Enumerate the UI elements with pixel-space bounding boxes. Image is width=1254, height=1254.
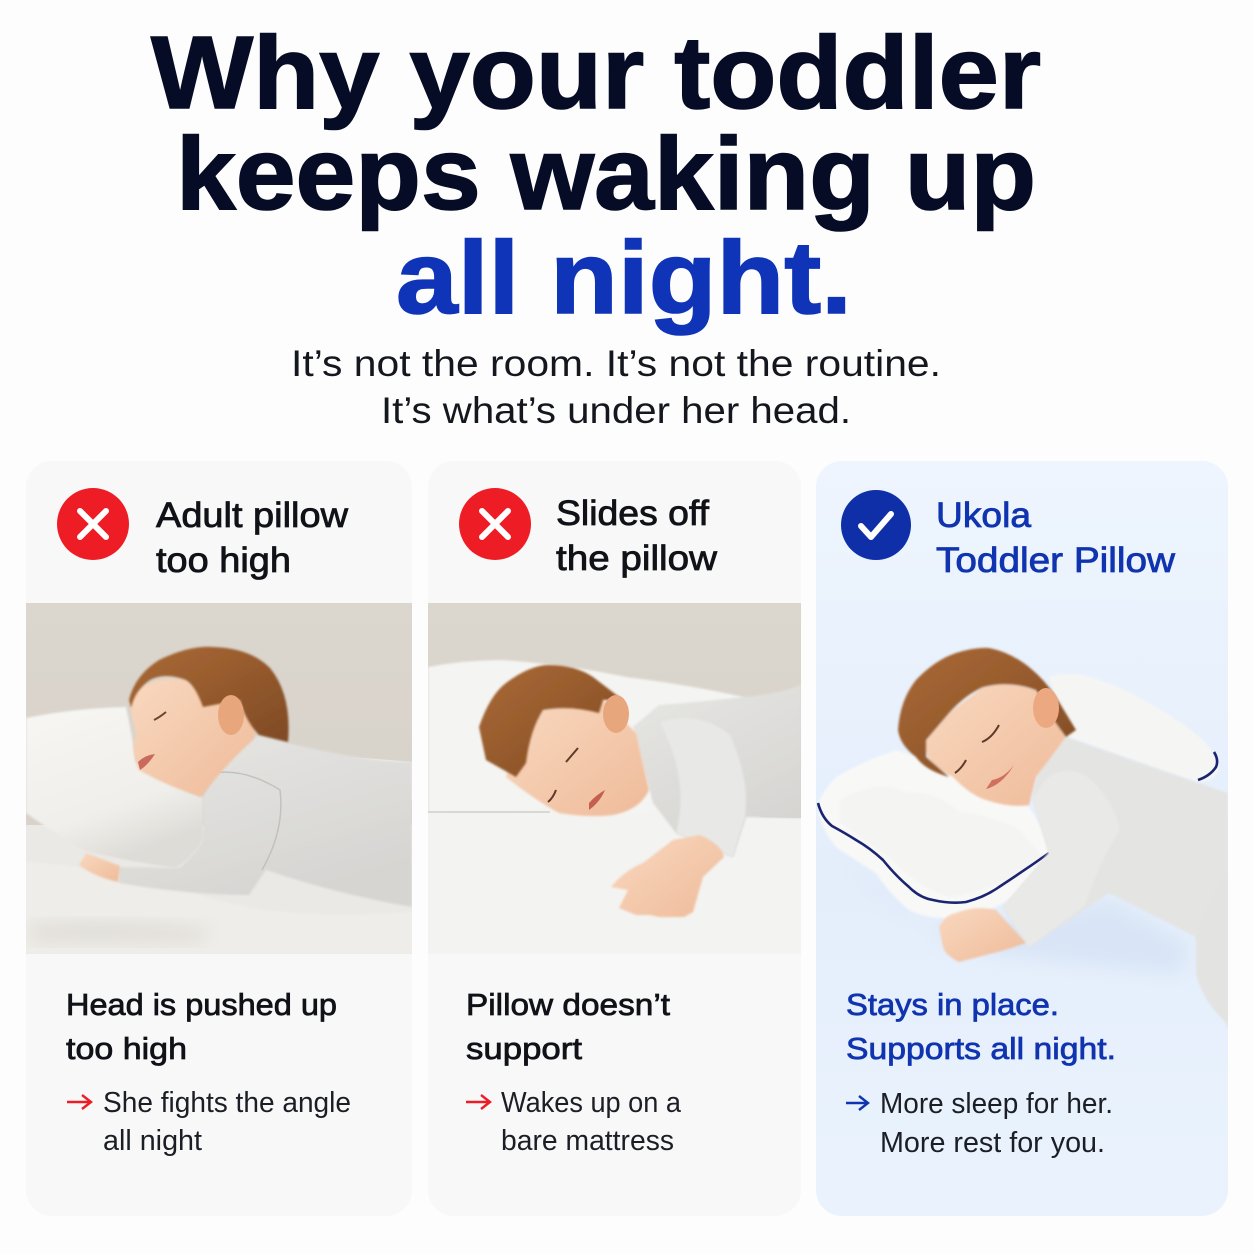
panel heading: Adult pillow <box>156 496 349 535</box>
consequence text: She fights the angle <box>103 1087 351 1119</box>
title: Why your toddler <box>151 15 1041 130</box>
panel caption <box>466 987 670 1066</box>
panel caption: support <box>466 1031 582 1066</box>
panel: adult pillow too high <box>26 488 412 1156</box>
panel: Ukola toddler pillow <box>816 461 1228 1216</box>
benefit text: More rest for you. <box>880 1127 1105 1159</box>
benefit text <box>880 1088 1113 1159</box>
consequence text: all night <box>103 1125 202 1157</box>
photo: toddler slipped off the pillow <box>428 603 801 954</box>
panel heading: Slides off <box>556 494 709 533</box>
title: keeps waking up <box>176 116 1036 231</box>
panel caption <box>846 987 1116 1066</box>
benefit text: More sleep for her. <box>880 1088 1113 1120</box>
panel caption: Head is pushed up <box>66 987 337 1022</box>
panel caption: too high <box>66 1031 187 1066</box>
panel caption: Supports all night. <box>846 1031 1116 1066</box>
consequence text <box>103 1087 351 1157</box>
subtitle: It’s what’s under her head. <box>381 390 851 431</box>
panel heading: too high <box>156 541 291 580</box>
subtitle: It’s not the room. It’s not the routine. <box>291 343 941 384</box>
panel heading <box>556 494 718 578</box>
icon: red cross <box>459 488 531 560</box>
panel heading <box>156 496 349 580</box>
subtitle <box>291 343 941 431</box>
panel caption: Pillow doesn’t <box>466 987 670 1022</box>
panel: slides off the pillow <box>428 488 801 1150</box>
panel caption <box>66 987 337 1066</box>
icon: red cross <box>57 488 129 560</box>
arrow: red <box>67 1095 91 1109</box>
arrow: blue <box>846 1096 868 1110</box>
photo: toddler on a high adult pillow <box>26 603 412 954</box>
consequence text: Wakes up on a <box>501 1087 682 1119</box>
consequence text: bare mattress <box>501 1125 674 1157</box>
panel heading: Ukola <box>936 496 1032 535</box>
panel caption: Stays in place. <box>846 987 1059 1022</box>
title <box>151 15 1041 335</box>
photo: toddler on the Ukola pillow <box>818 648 1228 1030</box>
panel heading: the pillow <box>556 539 718 578</box>
panel heading: Toddler Pillow <box>936 541 1176 580</box>
title: all night. <box>396 220 852 335</box>
panel heading <box>936 496 1176 580</box>
arrow: red <box>466 1095 490 1109</box>
icon: blue check <box>841 490 911 560</box>
consequence text <box>501 1087 682 1157</box>
